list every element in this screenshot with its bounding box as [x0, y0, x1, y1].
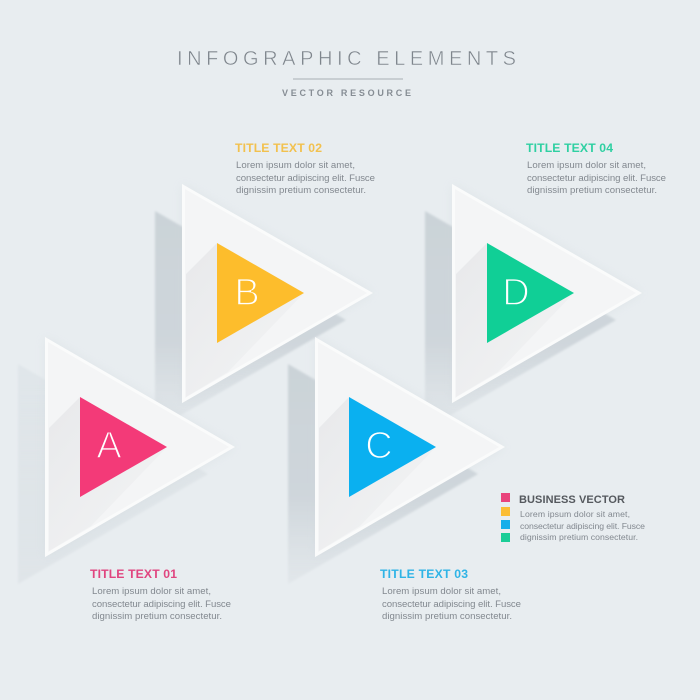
subtitle: VECTOR RESOURCE [282, 88, 411, 98]
panel: triangle C [288, 337, 505, 584]
letter B: B [234, 272, 260, 314]
panel: triangle D [425, 184, 642, 430]
text block: title 02 [235, 141, 375, 196]
text block: title 01: consectetur adipiscing elit. Fusce [92, 599, 231, 610]
text block: title 03: TITLE TEXT 03 [380, 567, 468, 581]
text block: title 01: TITLE TEXT 01 [90, 567, 177, 581]
text block: title 01: Lorem ipsum dolor sit amet, [92, 586, 211, 597]
text block: title 02: TITLE TEXT 02 [235, 141, 322, 155]
text block: title 04: TITLE TEXT 04 [526, 141, 613, 155]
text block: title 01 [90, 567, 231, 622]
text block: title 03: consectetur adipiscing elit. Fusce [382, 599, 521, 610]
legend: business vector: Lorem ipsum dolor sit amet, [520, 509, 630, 519]
text block: title 02: Lorem ipsum dolor sit amet, [236, 160, 355, 171]
letter A: A [96, 425, 122, 467]
panel: triangle B [155, 184, 373, 430]
legend: business vector: BUSINESS VECTOR [519, 494, 625, 506]
text block: title 03: dignissim pretium consectetur. [382, 611, 512, 622]
text block: title 02: dignissim pretium consectetur. [236, 185, 366, 196]
legend: business vector [501, 493, 645, 542]
text block: title 03: Lorem ipsum dolor sit amet, [382, 586, 501, 597]
text block: title 01: dignissim pretium consectetur. [92, 611, 222, 622]
text block: title 04: Lorem ipsum dolor sit amet, [527, 160, 646, 171]
text block: title 03 [380, 567, 521, 622]
text block: title 04 [526, 141, 666, 196]
text block: title 02: consectetur adipiscing elit. Fusce [236, 173, 375, 184]
panel: triangle A [18, 337, 235, 584]
letter D: D [502, 272, 530, 314]
text block: title 04: consectetur adipiscing elit. Fusce [527, 173, 666, 184]
title: INFOGRAPHIC ELEMENTS [177, 48, 516, 70]
legend: business vector: dignissim pretium consectetur. [520, 532, 638, 542]
letter C: C [365, 425, 393, 467]
title underline [293, 78, 403, 80]
text block: title 04: dignissim pretium consectetur. [527, 185, 657, 196]
legend: business vector: consectetur adipiscing elit. Fusce [520, 521, 645, 531]
